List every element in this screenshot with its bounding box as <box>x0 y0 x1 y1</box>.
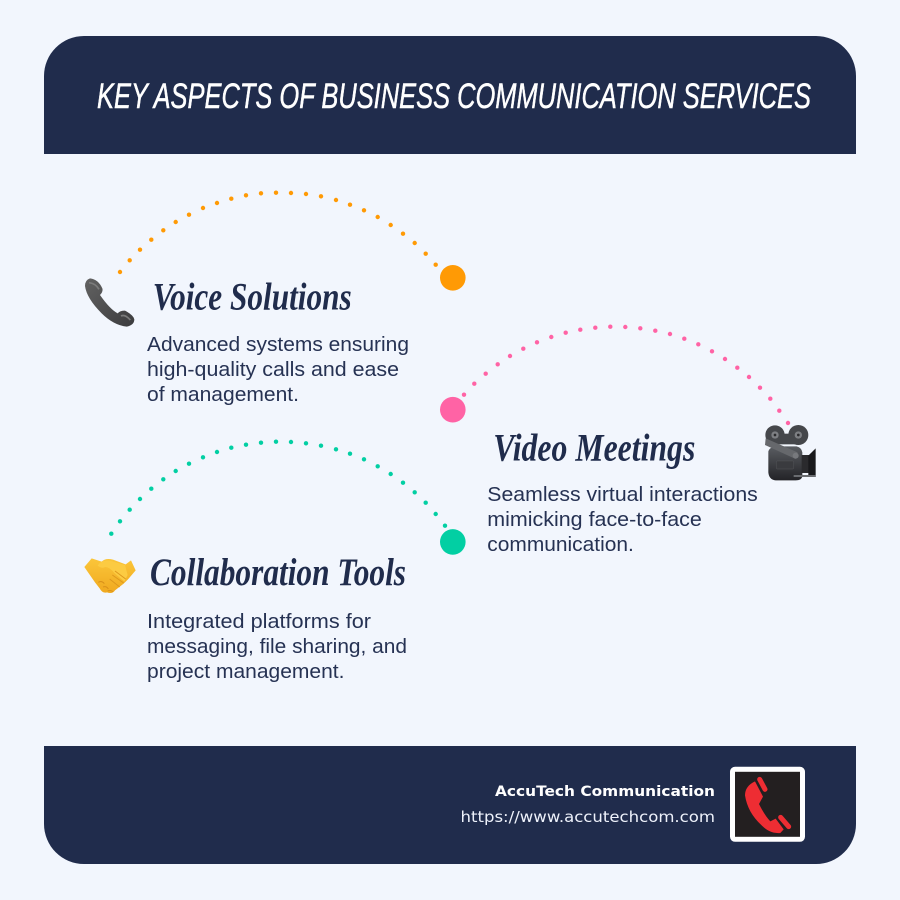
dotted arc: collaboration <box>109 440 447 536</box>
heading: voice solutions: Voice Solutions <box>153 276 352 318</box>
description: voice solutions: of management. <box>147 384 299 406</box>
marker: green circle <box>440 529 466 555</box>
description: collaboration tools: Integrated platforms for <box>147 611 371 633</box>
panel: voice solutions <box>85 190 466 406</box>
description: voice solutions: Advanced systems ensuring <box>147 334 409 356</box>
description: video meetings: mimicking face-to-face <box>487 509 702 531</box>
dotted arc: voice <box>118 190 438 274</box>
icon: handshake <box>84 558 136 593</box>
description: voice solutions: high-quality calls and ease <box>147 359 399 381</box>
heading: collaboration tools: Collaboration Tools <box>150 551 406 594</box>
marker: orange circle <box>440 265 466 291</box>
description: video meetings <box>487 484 758 556</box>
description: video meetings: Seamless virtual interactions <box>487 484 758 506</box>
description: collaboration tools <box>147 611 407 683</box>
heading: video meetings: Video Meetings <box>493 426 695 470</box>
panel: collaboration tools <box>84 440 466 683</box>
icon: movie camera <box>765 425 816 480</box>
panel: video meetings <box>440 324 816 556</box>
icon: company logo <box>730 767 805 842</box>
description: collaboration tools: messaging, file sharing, and <box>147 636 407 658</box>
header banner <box>44 36 856 154</box>
description: voice solutions <box>147 334 409 406</box>
dotted arc: video <box>462 324 790 425</box>
description: video meetings: communication. <box>487 534 634 556</box>
description: collaboration tools: project management. <box>147 661 344 683</box>
footer banner <box>44 746 856 864</box>
marker: pink circle <box>440 397 466 423</box>
company name: AccuTech Communication <box>495 784 715 800</box>
icon: telephone receiver <box>85 278 134 327</box>
website url: https://www.accutechcom.com <box>460 808 715 826</box>
